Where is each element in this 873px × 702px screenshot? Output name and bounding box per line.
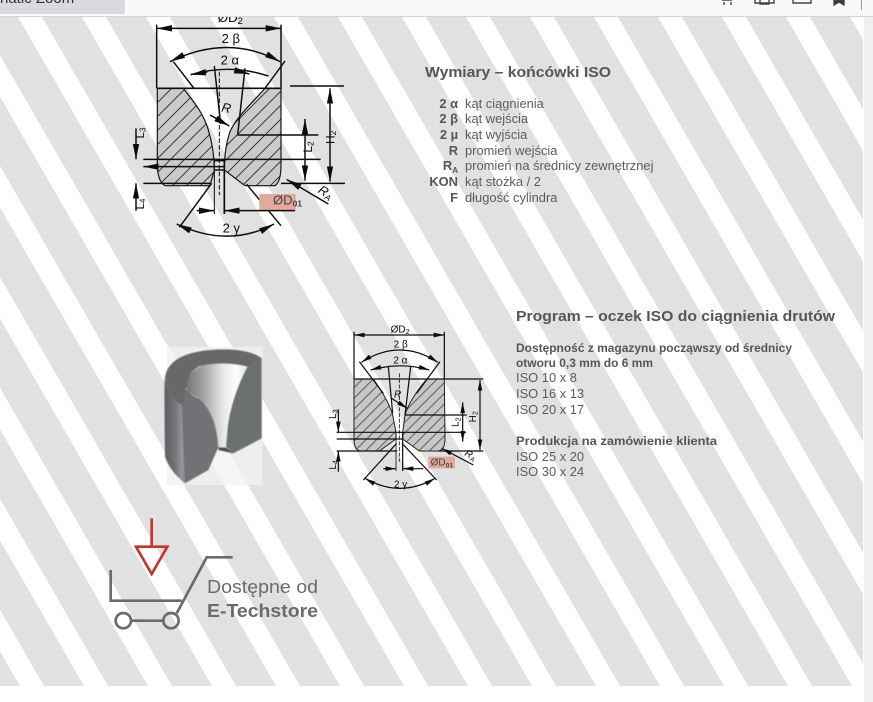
store label: Dostępne od xyxy=(207,577,318,597)
dimension labels: H xyxy=(468,415,479,422)
symbol RA: promień na średnicy zewnętrznej xyxy=(465,158,653,173)
dimension labels: A xyxy=(468,455,476,464)
dimension labels: ØD xyxy=(431,458,446,469)
dimension arrows xyxy=(338,335,480,488)
cart xyxy=(111,557,233,628)
dimension labels: H xyxy=(323,135,337,144)
ØD01 highlight xyxy=(259,194,296,211)
symbol 2 mu: kąt wyjścia xyxy=(465,127,528,142)
text block: stock availability: otworu 0,3 mm do 6 mm xyxy=(516,356,653,370)
dimension labels: 01 xyxy=(446,462,453,469)
dimension labels: ØD xyxy=(391,324,406,335)
symbol F: długość cylindra xyxy=(465,190,558,205)
left die body xyxy=(354,379,396,451)
legend: dimension symbols xyxy=(429,96,653,205)
dimension labels: 01 xyxy=(292,198,302,208)
symbol RA: R xyxy=(443,158,452,173)
toolbar icons xyxy=(722,0,862,10)
dimension labels xyxy=(328,324,480,491)
dimension labels: 4 xyxy=(333,460,340,464)
symbol 2 alpha: kąt ciągnienia xyxy=(465,96,545,111)
dimension labels: 2 γ xyxy=(223,220,240,235)
symbol 2 beta: kąt wejścia xyxy=(465,111,529,126)
dimension labels xyxy=(135,10,338,235)
text block: stock availability: Dostępność z magazynu począwszy od średnicy xyxy=(516,341,792,355)
right die body xyxy=(224,88,281,186)
left die body xyxy=(157,88,214,186)
dimension labels: 2 β xyxy=(222,31,240,46)
dimension labels: 2 xyxy=(328,130,338,135)
dimension labels: R xyxy=(220,99,233,116)
text block: stock availability xyxy=(516,341,792,417)
dimension labels: L xyxy=(328,413,339,419)
zoom tab xyxy=(0,0,125,14)
scrollbar track xyxy=(864,17,873,702)
symbol KON xyxy=(429,174,541,189)
text block: stock availability: ISO 20 x 17 xyxy=(516,402,584,417)
dimension labels: L xyxy=(301,146,315,153)
symbol R: R xyxy=(449,143,459,158)
icon: shopping cart with red arrow xyxy=(111,518,233,628)
dimension labels: L xyxy=(328,464,339,470)
dimension labels: L xyxy=(135,132,147,138)
ØD01 highlight xyxy=(428,457,455,468)
text block: made to order xyxy=(516,434,717,479)
dimension labels: ØD xyxy=(218,10,238,25)
dimension lines xyxy=(143,25,345,227)
dimension labels: 3 xyxy=(333,409,340,413)
dimension arrows xyxy=(136,28,330,236)
symbol 2 alpha: 2 α xyxy=(439,96,458,111)
symbol KON: kąt stożka / 2 xyxy=(465,174,541,189)
symbol 2 mu: 2 µ xyxy=(440,127,458,142)
text block: made to order: ISO 30 x 24 xyxy=(516,464,584,479)
technical drawing: small die cross-section xyxy=(328,324,483,491)
dimension labels: 2 xyxy=(455,417,462,421)
heading: program: Program – oczek ISO do ciągnienia drutów xyxy=(516,308,835,325)
dimension labels: 2 α xyxy=(221,53,239,68)
heading: dimensions: Wymiary – końcówki ISO xyxy=(425,65,611,81)
text block: made to order: ISO 25 x 20 xyxy=(516,449,584,464)
store label xyxy=(207,577,318,621)
dimension labels: R xyxy=(462,448,474,461)
dimension labels: 3 xyxy=(139,127,148,132)
dimension labels: L xyxy=(451,421,462,427)
dimension labels: 2 xyxy=(473,411,480,415)
symbol 2 beta: 2 β xyxy=(439,111,458,126)
dimension labels: A xyxy=(322,191,333,203)
technical drawing: large die cross-section xyxy=(135,10,345,236)
dimension labels: 2 xyxy=(306,141,316,146)
symbol R: promień wejścia xyxy=(465,143,558,158)
symbol RA: A xyxy=(452,166,458,175)
dimension labels: ØD xyxy=(273,192,292,207)
dimension labels: 2 xyxy=(238,16,243,26)
dimension labels: 2 α xyxy=(393,356,408,367)
dimension lines xyxy=(337,332,483,480)
text block: made to order: Produkcja na zamówienie klienta xyxy=(516,434,717,448)
text block: stock availability: ISO 16 x 13 xyxy=(516,386,584,401)
right die body xyxy=(403,379,445,451)
dimension labels: R xyxy=(394,390,401,401)
browser toolbar xyxy=(0,0,873,17)
photo: drawing die cutaway xyxy=(164,347,263,485)
dimension labels: 2 xyxy=(406,329,410,336)
dimension labels: 4 xyxy=(139,198,148,203)
symbol KON: KON xyxy=(429,174,458,189)
dimension labels: 2 β xyxy=(394,340,408,351)
text block: stock availability: ISO 10 x 8 xyxy=(516,370,577,385)
dimension labels: 2 γ xyxy=(394,480,407,491)
dimension labels: R xyxy=(316,183,331,199)
red arrow xyxy=(136,518,167,574)
dimension labels: L xyxy=(135,203,147,209)
store label: E-Techstore xyxy=(207,601,318,621)
symbol F: F xyxy=(450,190,458,205)
